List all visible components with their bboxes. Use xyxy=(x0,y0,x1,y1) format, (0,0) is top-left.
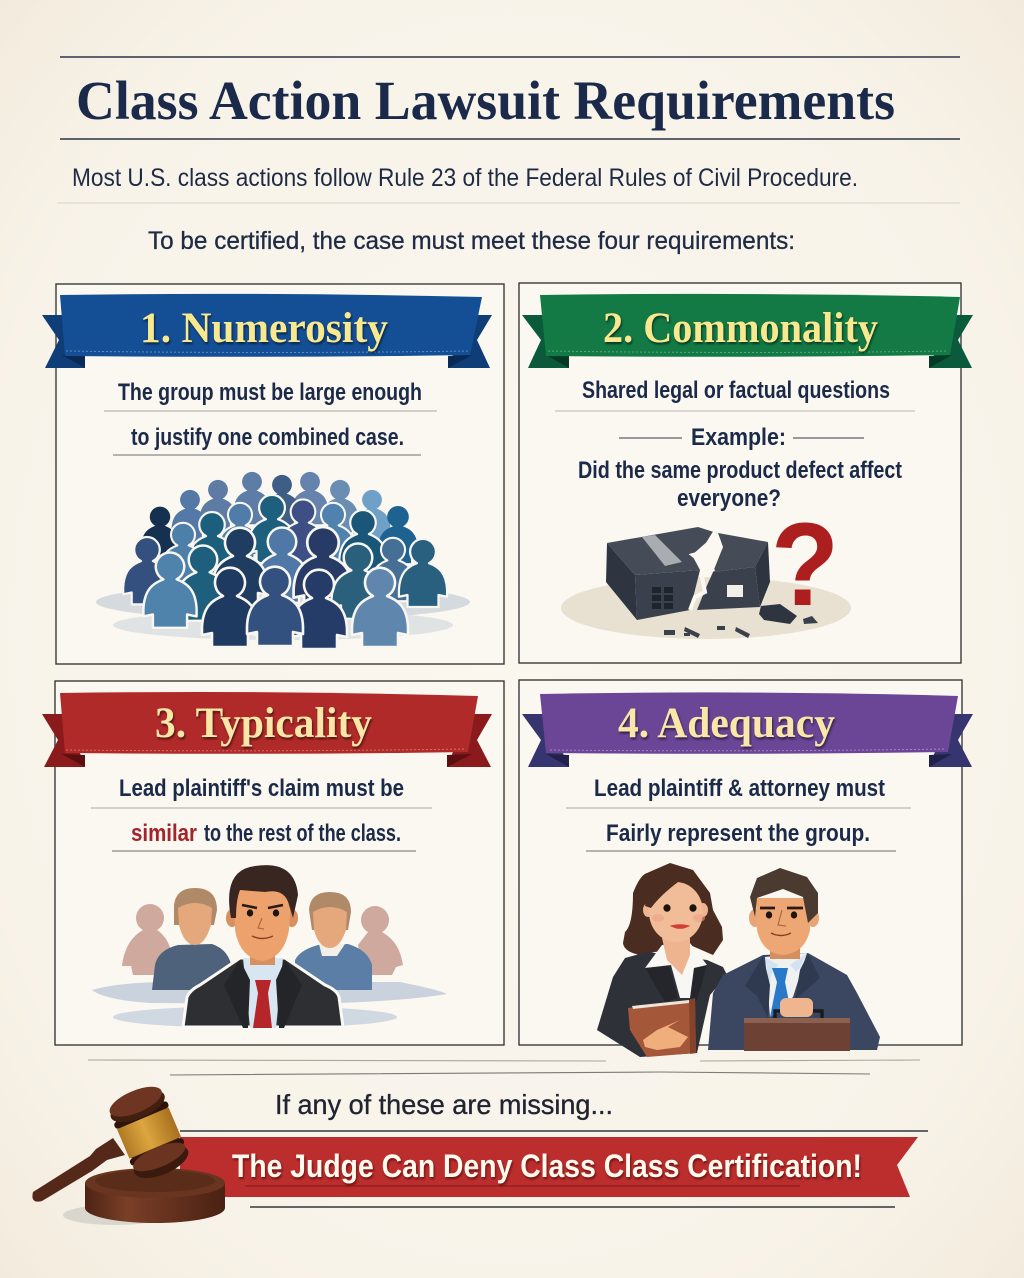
description: typicality xyxy=(91,775,432,851)
icon: broken product with question mark xyxy=(561,499,851,639)
description: commonality: everyone? xyxy=(677,485,781,512)
footer: warning text: If any of these are missing... xyxy=(275,1089,613,1120)
banner: 1. Numerosity xyxy=(42,294,492,368)
gavel handle xyxy=(32,1138,125,1202)
description: typicality: to the rest of the class. xyxy=(204,820,401,847)
banner: 4. Adequacy: 4. Adequacy xyxy=(618,700,835,747)
side class members xyxy=(152,888,372,990)
description: commonality: Shared legal or factual questions xyxy=(582,377,890,404)
description: numerosity: to justify one combined case. xyxy=(131,424,404,451)
description: typicality: similar xyxy=(131,820,197,847)
question mark: ? xyxy=(771,499,839,631)
description: commonality: Example: xyxy=(691,424,786,451)
footer: red banner xyxy=(180,1131,928,1207)
footer: red banner: The Judge Can Deny Class Class Certification! xyxy=(232,1148,862,1184)
description: commonality xyxy=(555,377,915,512)
description: adequacy: Lead plaintiff & attorney must xyxy=(594,775,885,802)
right half of device xyxy=(697,533,770,610)
banner: 2. Commonality: 2. Commonality xyxy=(603,305,878,352)
icon: lead plaintiff and attorney xyxy=(597,863,880,1057)
left half of device xyxy=(606,527,717,620)
far class members xyxy=(122,904,403,975)
description: adequacy xyxy=(566,775,911,851)
woman with book xyxy=(597,863,727,1057)
sound block xyxy=(85,1168,225,1223)
book xyxy=(628,998,696,1057)
panel: commonality xyxy=(519,283,973,663)
icon: crowd of people xyxy=(96,472,470,649)
gavel head xyxy=(105,1080,193,1185)
lead plaintiff xyxy=(183,865,343,1028)
description: typicality: Lead plaintiff's claim must be xyxy=(119,775,404,802)
divider lines xyxy=(88,1060,920,1075)
panel: adequacy xyxy=(519,680,973,1057)
icon: lead plaintiff with class members xyxy=(92,865,447,1028)
description: adequacy: Fairly represent the group. xyxy=(606,820,870,847)
description: numerosity: The group must be large enough xyxy=(118,379,422,406)
panel: typicality xyxy=(42,681,504,1045)
description: commonality: Did the same product defect affect xyxy=(578,457,902,484)
title: Class Action Lawsuit Requirements xyxy=(76,70,895,131)
intro sentence: To be certified, the case must meet these four requirements: xyxy=(148,227,795,255)
banner: 4. Adequacy xyxy=(522,692,973,767)
icon: gavel xyxy=(32,1080,225,1225)
banner: 1. Numerosity: 1. Numerosity xyxy=(140,305,388,352)
subtitle: Most U.S. class actions follow Rule 23 of the Federal Rules of Civil Procedure. xyxy=(72,164,858,192)
banner: 3. Typicality xyxy=(42,692,492,767)
attorney with briefcase xyxy=(708,868,880,1051)
panel: numerosity xyxy=(42,284,504,664)
banner: 2. Commonality xyxy=(522,294,973,368)
banner: 3. Typicality: 3. Typicality xyxy=(155,700,372,747)
description: numerosity xyxy=(104,379,437,455)
